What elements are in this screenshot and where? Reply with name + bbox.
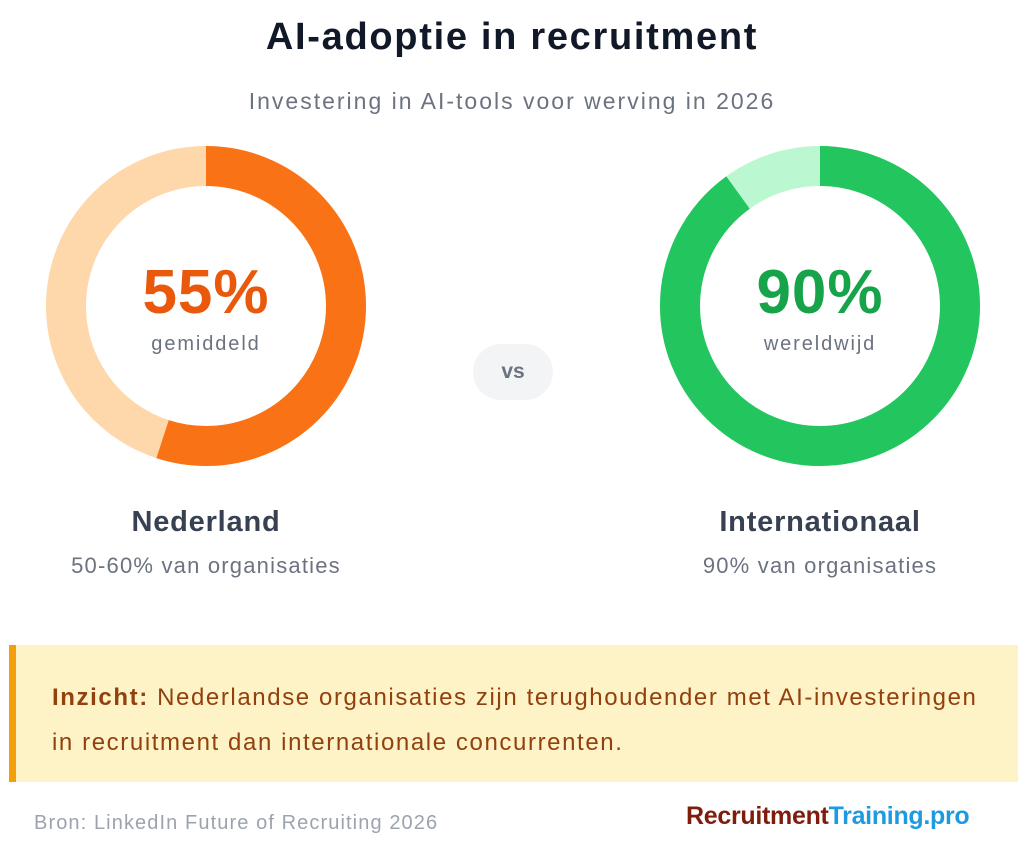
donut label: 90%: 90% bbox=[756, 258, 884, 327]
source: Bron: LinkedIn Future of Recruiting 2026 bbox=[34, 812, 438, 834]
subtitle: Investering in AI-tools voor werving in 2026 bbox=[249, 88, 775, 114]
donut: Nederland bbox=[46, 146, 366, 466]
label: Internationaal bbox=[703, 506, 937, 578]
title: AI-adoptie in recruitment bbox=[266, 16, 758, 58]
label: Nederland: 50-60% van organisaties bbox=[71, 553, 341, 578]
vs badge: vs bbox=[501, 360, 525, 383]
label: Nederland: Nederland bbox=[131, 506, 280, 538]
donut label: 90%: wereldwijd bbox=[764, 333, 876, 355]
logo: RecruitmentTraining.pro bbox=[686, 802, 969, 830]
callout: insight bbox=[9, 645, 1018, 782]
label: Internationaal: 90% van organisaties bbox=[703, 553, 937, 578]
label: Nederland bbox=[71, 506, 341, 578]
label: Internationaal: Internationaal bbox=[719, 506, 921, 538]
donut label: 55%: 55% bbox=[142, 258, 270, 327]
vs badge bbox=[473, 344, 553, 400]
callout: insight: Inzicht: Nederlandse organisaties zijn terughoudender met AI-investeringen in recruitment dan internationale concurrenten. bbox=[52, 684, 978, 756]
donut: Internationaal bbox=[660, 146, 980, 466]
donut label: 55%: gemiddeld bbox=[151, 333, 261, 355]
